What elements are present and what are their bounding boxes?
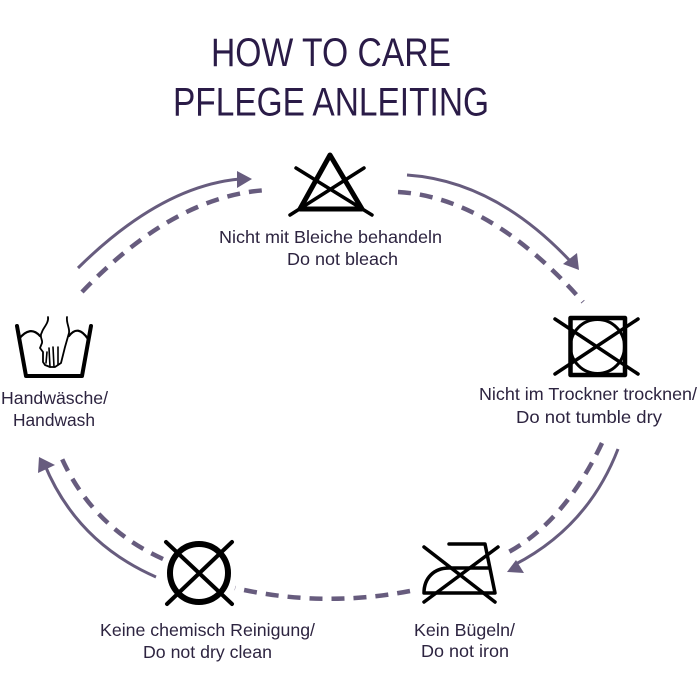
label: do not bleach: Nicht mit Bleiche behandeln <box>219 227 442 247</box>
title: PFLEGE ANLEITING <box>173 80 489 124</box>
arrow: dry clean to handwash <box>38 452 163 577</box>
label: handwash <box>1 388 108 430</box>
icon: do not bleach <box>290 155 372 215</box>
arrow: handwash to bleach <box>78 171 268 292</box>
icon: do not iron <box>424 544 498 602</box>
label: do not iron <box>414 620 515 661</box>
icon: do not tumble dry <box>555 318 638 375</box>
label: do not dry clean: Do not dry clean <box>143 642 272 662</box>
label: do not tumble dry <box>479 384 697 427</box>
label: do not tumble dry: Nicht im Trockner trocknen/ <box>479 384 697 404</box>
label: do not bleach: Do not bleach <box>287 249 398 269</box>
arrow: bleach to tumble dry <box>398 175 583 302</box>
title <box>173 31 489 124</box>
label: handwash: Handwäsche/ <box>1 388 108 408</box>
title: HOW TO CARE <box>211 31 451 75</box>
label: do not dry clean: Keine chemisch Reinigung/ <box>100 620 315 640</box>
arrow: tumble dry to iron <box>503 443 618 573</box>
icon: handwash <box>17 317 91 376</box>
label: do not dry clean <box>100 620 315 662</box>
label: do not bleach <box>219 227 442 269</box>
label: do not tumble dry: Do not tumble dry <box>516 407 662 427</box>
label: handwash: Handwash <box>13 410 95 430</box>
label: do not iron: Do not iron <box>421 641 509 661</box>
icon: do not dry clean <box>166 542 232 604</box>
label: do not iron: Kein Bügeln/ <box>414 620 515 640</box>
arrow: iron to dry clean <box>235 588 410 599</box>
